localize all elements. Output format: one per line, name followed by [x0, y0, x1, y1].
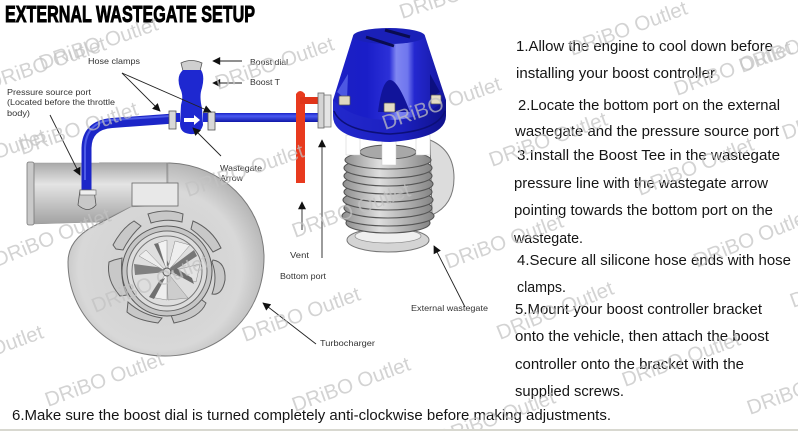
instruction steps: wastegate.	[513, 231, 583, 247]
instruction steps: 5.Mount your boost controller bracket	[515, 302, 762, 318]
tee body	[179, 70, 203, 134]
watermarks: DRiBO Outlet	[493, 277, 617, 345]
boost tee	[169, 60, 215, 134]
instruction steps: 6.Make sure the boost dial is turned completely anti-clockwise before making adjustments.	[12, 408, 611, 424]
compressor blades	[134, 240, 200, 300]
instruction steps: supplied screws.	[515, 384, 624, 400]
blue hose right	[214, 113, 320, 122]
turbocharger	[27, 162, 264, 356]
diagram labels: Vent	[290, 250, 310, 260]
diagram labels: body)	[7, 108, 30, 118]
bottom border	[0, 429, 798, 431]
instruction steps: clamps.	[517, 280, 566, 296]
diagram labels: Hose clamps	[88, 56, 140, 66]
diagram labels: (Located before the throttle	[7, 97, 115, 107]
watermarks: DRiBO Outlet	[36, 12, 161, 75]
watermarks: DRiBO Outlet	[619, 328, 744, 392]
instruction steps: onto the vehicle, then attach the boost	[515, 329, 769, 345]
watermarks: DRiBO Outlet	[486, 108, 611, 172]
dome top	[353, 28, 425, 44]
diagram labels: Boost dial	[250, 57, 288, 67]
diagram labels: External wastegate	[411, 303, 488, 313]
bottom port clamps	[318, 93, 324, 128]
watermarks: DRiBO Outlet	[289, 179, 414, 243]
blue silicone hose left	[78, 116, 174, 210]
diagram labels: Turbocharger	[320, 338, 375, 348]
watermarks: DRiBO Outlet	[289, 353, 414, 417]
instruction steps: 4.Secure all silicone hose ends with hose	[517, 253, 791, 269]
bellows	[342, 151, 434, 233]
instruction steps: installing your boost controller	[516, 66, 715, 82]
watermarks: DRiBO Outlet	[379, 72, 504, 135]
red vent pipe	[296, 91, 320, 183]
watermarks: DRiBO Outlet	[239, 283, 364, 347]
spring	[360, 145, 416, 159]
leader arrows	[50, 61, 465, 344]
instruction steps: wastegate and the pressure source port	[514, 124, 779, 140]
turbo inlet tube	[30, 163, 168, 224]
watermarks: DRiBO Outlet	[42, 348, 167, 412]
scroll seam	[166, 163, 168, 183]
turbo volute windows	[108, 211, 225, 323]
watermarks: DRiBO Outlet	[212, 32, 337, 95]
base flange	[347, 228, 429, 252]
tee arrow	[184, 115, 200, 125]
diagram labels: Wastegate	[220, 163, 262, 173]
hose clamps on tee	[169, 111, 215, 130]
watermarks: DRiBO Outlet	[671, 37, 796, 101]
instruction steps: 2.Locate the bottom port on the external	[518, 98, 780, 114]
watermarks: DRiBO Outlet	[633, 133, 757, 201]
inlet flange	[27, 162, 34, 225]
instruction steps: 1.Allow the engine to cool down before	[516, 39, 773, 55]
watermarks: DRiBO Outlet	[442, 210, 567, 274]
instruction steps: pressure line with the wastegate arrow	[514, 176, 769, 192]
standoffs	[346, 135, 360, 155]
diagram labels: Pressure source port	[7, 87, 92, 97]
dome slots	[366, 30, 410, 46]
instruction steps: 3.Install the Boost Tee in the wastegate	[517, 148, 780, 164]
wastegate mount block	[132, 183, 178, 206]
title: EXTERNAL WASTEGATE SETUP	[5, 1, 255, 27]
diagram labels: Bottom port	[280, 271, 327, 281]
bolts	[339, 96, 350, 105]
watermarks: DRiBO Outlet	[16, 97, 141, 160]
instruction steps: pointing towards the bottom port on the	[514, 203, 773, 219]
instruction steps: controller onto the bracket with the	[515, 357, 744, 373]
side flange disc	[430, 140, 454, 215]
boost dial cap	[181, 60, 202, 71]
watermarks: DRiBO Outlet	[182, 139, 307, 202]
blue dome	[333, 29, 446, 120]
blue flange	[333, 100, 446, 142]
diagram labels: Arrow	[220, 173, 244, 183]
dome ribs	[378, 80, 410, 112]
watermarks: DRiBO Outlet	[88, 250, 212, 318]
diagram labels: Boost T	[250, 77, 280, 87]
turbo port nipple	[78, 190, 96, 210]
external wastegate	[318, 28, 454, 252]
diagram labels	[7, 56, 488, 348]
turbo compressor scroll	[68, 163, 264, 356]
compressor wheel rings	[122, 226, 212, 316]
